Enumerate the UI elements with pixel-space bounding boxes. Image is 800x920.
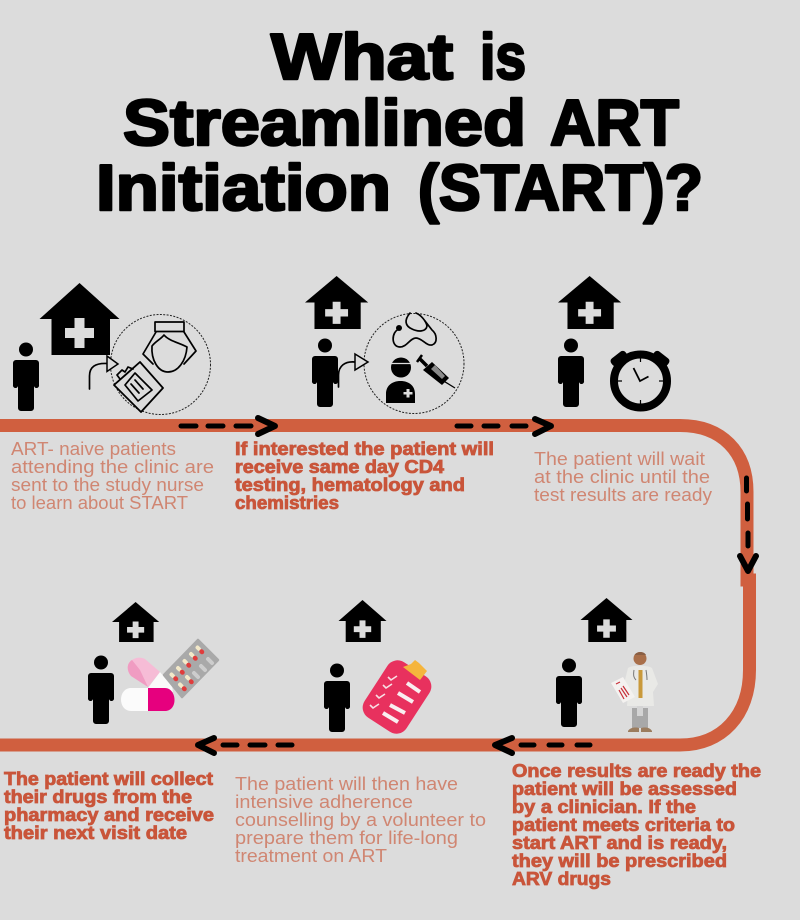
icon: blister pack [164,640,218,697]
arrow: step 4 to 5 [495,738,590,753]
text: step 4: patient meets criteria to [512,815,735,835]
title: (START)? [418,151,703,224]
text: step 6: their next visit date [4,823,187,843]
icon: clinic [338,600,386,642]
timeline path [0,426,750,745]
text: step 4 [512,761,761,889]
text: step 1 [11,439,214,513]
step 4 icons [556,598,658,732]
icon: clinic [305,276,368,329]
icon: nurse [143,322,196,372]
icon: clinic [40,283,120,355]
title: What [271,20,453,93]
text: step 4: ARV drugs [512,869,611,889]
icon: person [13,342,39,411]
dotted circle [110,314,210,414]
text: step 5: counselling by a volunteer to [235,810,486,830]
text: step 2: testing, hematology and [235,475,465,495]
text: step 5 [235,774,486,866]
step 2 icons [305,276,464,414]
text: step 3: test results are ready [534,485,712,505]
title: is [480,20,526,93]
dotted circle [364,314,464,414]
step 3 icons [558,276,671,408]
step 5 icons [324,600,436,738]
icon: clinic [580,598,632,642]
icon: person [88,656,114,724]
text: step 4: start ART and is ready, [512,833,727,853]
title [96,20,703,224]
text: step 6: pharmacy and receive [4,805,214,825]
icon: clinic [112,602,159,642]
title: Streamlined [123,86,526,159]
text: step 6 [4,769,214,843]
text: step 1: attending the clinic are [11,457,214,477]
text: step 5: The patient will then have [235,774,458,794]
text: step 3: at the clinic until the [534,467,710,487]
text: step 1: to learn about START [11,493,188,513]
icon: person [558,338,584,407]
text: step 4: patient will be assessed [512,779,737,799]
icon: clipboard [114,362,163,412]
text: step 4: they will be prescribed [512,851,727,871]
text: step 5: intensive adherence [235,792,413,812]
icon: person [312,338,338,407]
title: Initiation [96,151,391,224]
text: step 2: If interested the patient will [235,439,494,459]
icon: clinic [558,276,621,329]
icon: person [324,664,350,732]
arrow: step 3 to 4 [740,478,756,571]
text: step 2: chemistries [235,493,339,513]
text: step 2: receive same day CD4 [235,457,444,477]
icon: doctor with report [611,652,658,732]
arrow: step 2 to 3 [457,419,551,434]
text: step 6: their drugs from the [4,787,192,807]
step 6 icons [88,602,218,724]
text: step 5: prepare them for life-long [235,828,458,848]
text: step 5: treatment on ART [235,846,387,866]
arrow: to tests [338,354,368,387]
icon: syringe [417,355,455,388]
text: step 2 [235,439,494,513]
text: step 4: by a clinician. If the [512,797,696,817]
text: step 1: ART- naive patients [11,439,176,459]
text: step 4: Once results are ready the [512,761,761,781]
icon: person [556,658,582,727]
icon: pink capsule [128,658,173,692]
icon: stethoscope [393,313,436,347]
text: step 3: The patient will wait [534,449,705,469]
text: step 6: The patient will collect [4,769,213,789]
text: step 3 [534,449,712,505]
text: step 1: sent to the study nurse [11,475,204,495]
icon: clock [609,349,671,408]
arrow: step 1 to 2 [181,418,275,434]
arrow: to nurse [90,356,118,389]
icon: magenta capsule [121,688,174,711]
title: ART [550,86,679,159]
arrow: step 5 to 6 [198,738,292,753]
icon: doctor [386,358,415,403]
step 1 icons [13,283,211,414]
icon: checklist clipboard [358,656,436,738]
